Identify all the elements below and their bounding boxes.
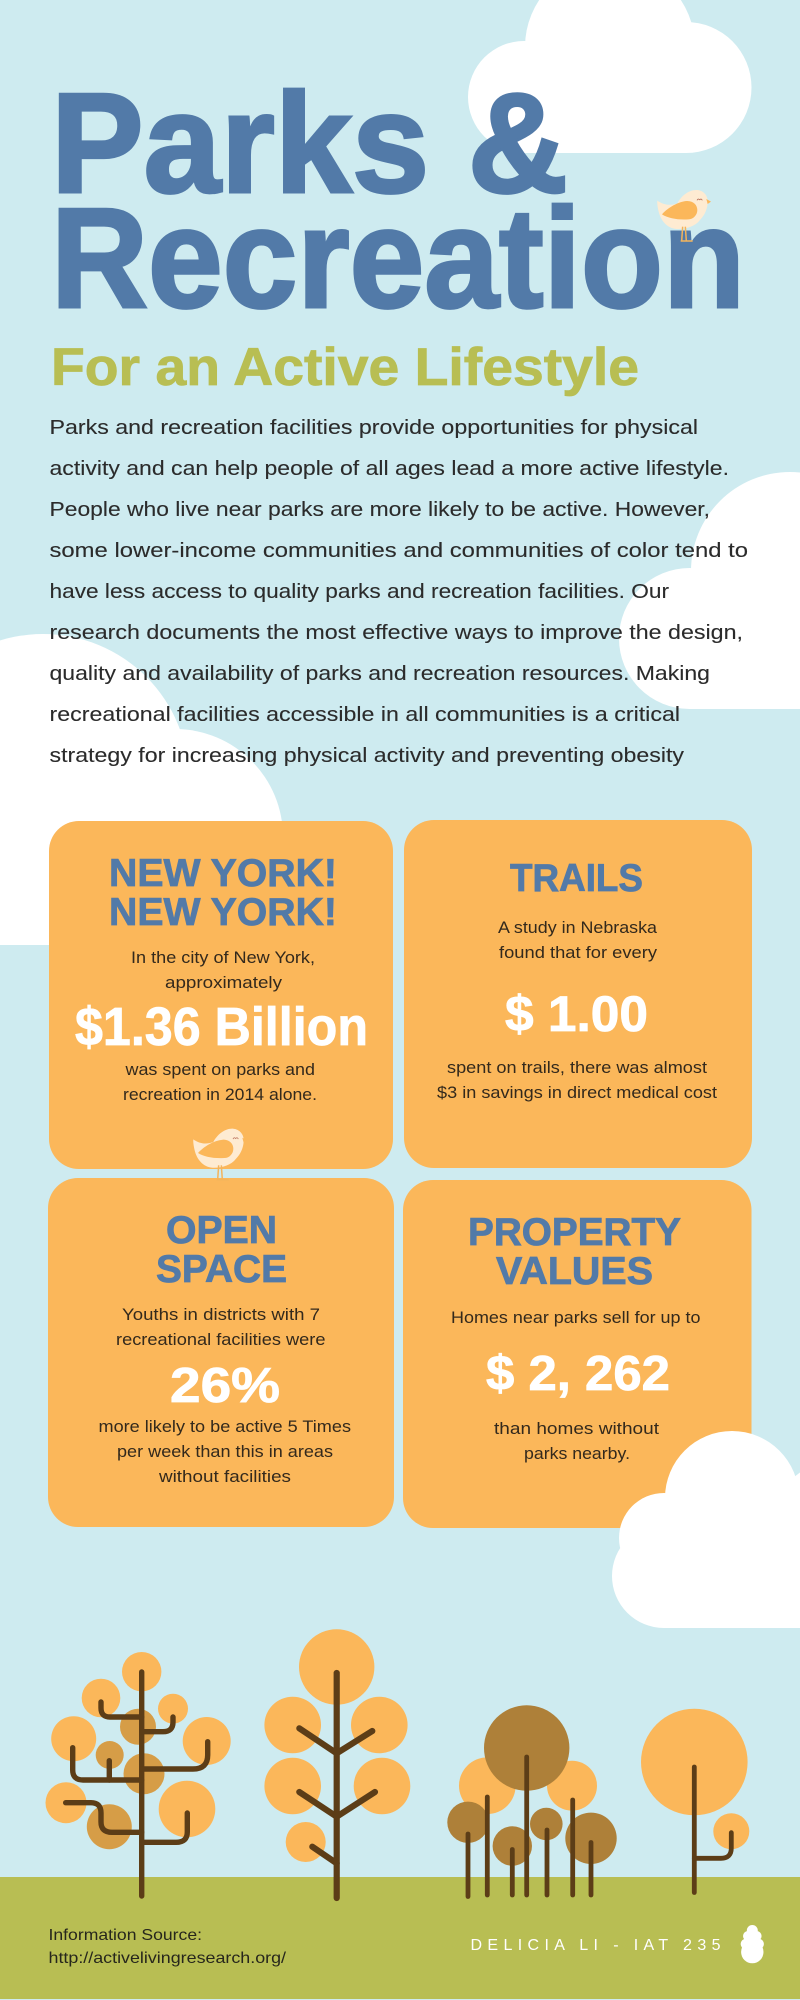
closing text — [123, 1060, 317, 1104]
cloud: middle right — [619, 472, 800, 709]
lead text: Youths in districts with 7 — [122, 1305, 320, 1324]
subtitle: For an Active Lifestyle — [51, 338, 639, 397]
intro paragraph: activity and can help people of all ages lead a more active lifestyle. — [50, 457, 729, 480]
source credit: Information Source: — [48, 1927, 202, 1944]
panel: Property Values — [403, 1180, 752, 1528]
lead text: approximately — [165, 973, 283, 992]
icon: small white tree — [741, 1925, 764, 1963]
card background — [404, 820, 752, 1168]
heading — [156, 1209, 287, 1291]
cloud: top right — [468, 0, 752, 153]
intro paragraph: research documents the most effective ways to improve the design, — [50, 621, 743, 644]
heading: VALUES — [496, 1250, 653, 1293]
closing text: was spent on parks and — [124, 1060, 315, 1079]
heading: NEW YORK! — [109, 891, 337, 934]
heading — [468, 1211, 681, 1293]
heading: NEW YORK! — [109, 852, 337, 895]
intro paragraph: Parks and recreation facilities provide opportunities for physical — [50, 416, 698, 439]
heading: TRAILS — [510, 857, 643, 900]
lead text: Homes near parks sell for up to — [451, 1308, 700, 1327]
closing text — [437, 1058, 717, 1102]
figure: $ 2, 262 — [486, 1347, 670, 1401]
panel: Trails — [404, 820, 752, 1168]
figure: 26% — [170, 1359, 280, 1413]
author credit: DELICIA LI - IAT 235 — [470, 1937, 721, 1954]
heading: SPACE — [156, 1248, 287, 1291]
tree 2: forked tree — [264, 1629, 410, 1898]
lead text: A study in Nebraska — [498, 918, 658, 937]
closing text: spent on trails, there was almost — [447, 1058, 707, 1077]
intro paragraph: have less access to quality parks and recreation facilities. Our — [50, 580, 669, 603]
source credit: http://activelivingresearch.org/ — [48, 1950, 287, 1967]
cloud: bottom right — [612, 1431, 800, 1628]
bird on the title — [657, 190, 711, 241]
lead text — [116, 1305, 326, 1349]
figure: $ 1.00 — [505, 986, 648, 1042]
title: Parks & — [51, 64, 568, 223]
cloud: middle left — [0, 634, 283, 945]
heading — [109, 852, 337, 934]
title: Recreation — [51, 179, 745, 338]
heading: OPEN — [166, 1209, 277, 1252]
closing text: recreation in 2014 alone. — [123, 1085, 317, 1104]
intro paragraph: recreational facilities accessible in all communities is a critical — [50, 703, 680, 726]
intro paragraph: strategy for increasing physical activity and preventing obesity — [50, 744, 685, 767]
ground — [0, 1877, 800, 1999]
lead text: found that for every — [499, 943, 658, 962]
title — [51, 64, 745, 338]
closing text: more likely to be active 5 Times — [98, 1417, 351, 1436]
lead text — [498, 918, 658, 962]
closing text: than homes without — [494, 1419, 659, 1438]
intro paragraph: People who live near parks are more likely to be active. However, — [50, 498, 710, 521]
panel: Open Space — [48, 1178, 394, 1527]
tree 1: branching tree — [46, 1652, 231, 1896]
closing text: $3 in savings in direct medical cost — [437, 1083, 717, 1102]
closing text: per week than this in areas — [117, 1442, 333, 1461]
card background — [403, 1180, 752, 1528]
intro paragraph — [50, 416, 748, 767]
bird on the New York card — [193, 1129, 247, 1180]
card background — [48, 1178, 394, 1527]
intro paragraph: quality and availability of parks and recreation resources. Making — [50, 662, 710, 685]
intro paragraph: some lower-income communities and communities of color tend to — [50, 539, 748, 562]
closing text — [98, 1417, 351, 1486]
lead text — [131, 948, 315, 992]
closing text: parks nearby. — [524, 1444, 630, 1463]
lead text: In the city of New York, — [131, 948, 315, 967]
tree 3: grove of round trees — [447, 1705, 617, 1896]
figure: $1.36 Billion — [75, 997, 368, 1057]
lead text: recreational facilities were — [116, 1330, 326, 1349]
card background — [49, 821, 393, 1169]
panel: New York — [49, 821, 393, 1169]
heading: PROPERTY — [468, 1211, 681, 1254]
closing text — [494, 1419, 659, 1463]
closing text: without facilities — [158, 1467, 291, 1486]
source credit — [48, 1927, 287, 1967]
tree 4: single round tree — [641, 1709, 749, 1892]
